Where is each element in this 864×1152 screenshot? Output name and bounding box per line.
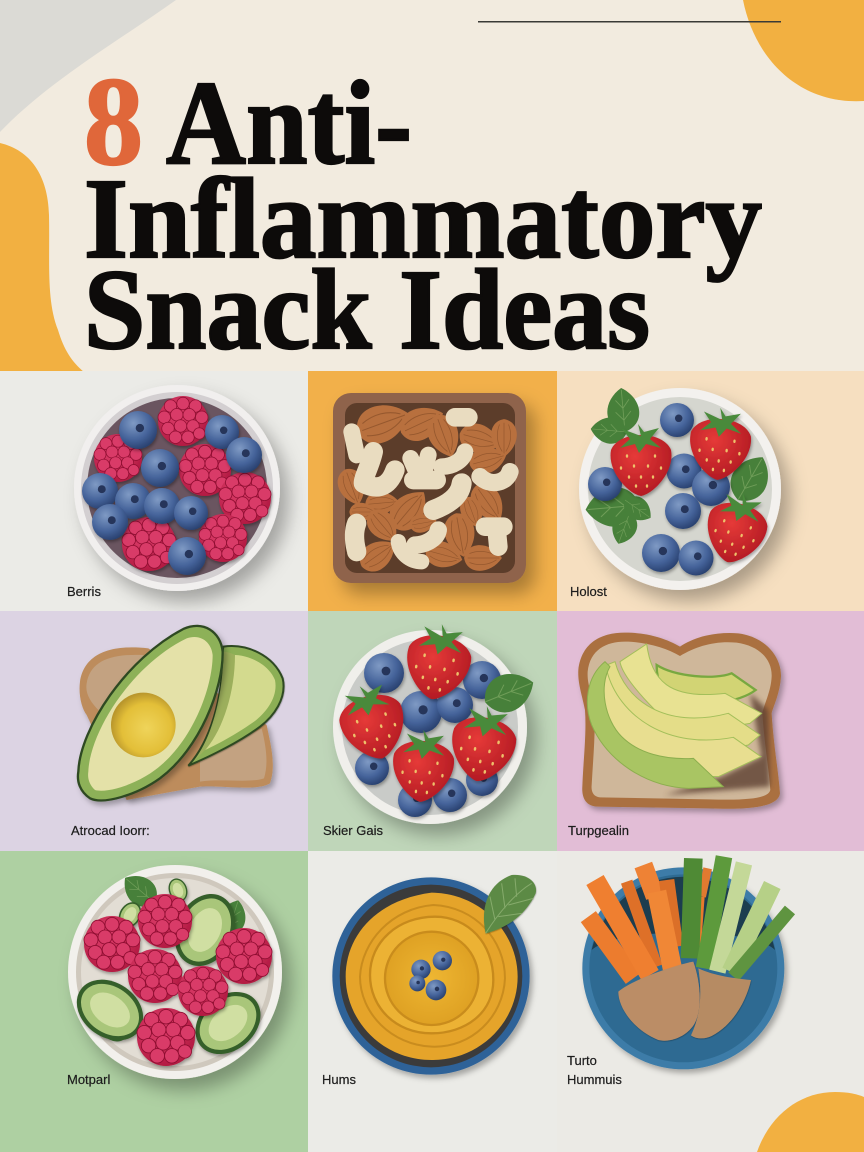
cucumbers bbox=[65, 876, 273, 1067]
leaf bbox=[478, 665, 540, 719]
panel: strawberries and blueberries bowl bbox=[557, 371, 864, 611]
toast shadow bbox=[665, 693, 770, 795]
decorative shape: orange top right bbox=[743, 0, 864, 101]
carrots bbox=[588, 865, 708, 978]
label: Hummuis bbox=[567, 1072, 622, 1087]
label: Berris bbox=[67, 584, 101, 599]
panel: avocado toast bbox=[557, 611, 864, 851]
raspberries bbox=[84, 894, 272, 1066]
label: Holost bbox=[570, 584, 607, 599]
toast crust bbox=[578, 633, 781, 809]
blueberries bbox=[355, 653, 501, 817]
toast bbox=[80, 647, 273, 800]
hummus pool bbox=[385, 932, 478, 1025]
toast crumb bbox=[588, 642, 772, 800]
strawberries bbox=[332, 619, 521, 805]
raspberries bbox=[94, 396, 271, 571]
panel: berries bbox=[0, 371, 308, 611]
slice 3 bbox=[607, 662, 760, 748]
hummus ridge bbox=[370, 917, 493, 1033]
label bbox=[567, 1053, 622, 1087]
avocado half bbox=[78, 626, 223, 800]
panel: avocado half on toast bbox=[0, 611, 308, 851]
decorative shape: orange left bbox=[0, 143, 84, 372]
title: Inflammatory bbox=[84, 155, 762, 282]
plate bbox=[68, 865, 282, 1079]
panel: veggie sticks and pita bbox=[557, 851, 864, 1152]
panel: hummus bowl bbox=[308, 851, 557, 1152]
label: Turpgealin bbox=[568, 823, 629, 838]
label: Turto bbox=[567, 1053, 597, 1068]
panel: nuts bbox=[308, 371, 557, 611]
slice 2 bbox=[602, 670, 761, 777]
hummus outer swirl bbox=[360, 905, 505, 1047]
strawberries bbox=[611, 405, 774, 570]
slice 4 bbox=[620, 644, 762, 726]
panel: raspberries and cucumber plate bbox=[0, 851, 308, 1152]
blueberries bbox=[82, 411, 262, 575]
title: Anti- bbox=[166, 56, 412, 189]
label: Atrocad Ioorr: bbox=[71, 823, 150, 838]
blueberries bbox=[409, 951, 452, 1000]
title: 8 bbox=[84, 53, 143, 192]
background: header bbox=[0, 0, 864, 372]
label: Hums bbox=[322, 1072, 356, 1087]
bowl bbox=[582, 867, 784, 1069]
title bbox=[84, 53, 762, 373]
almonds bbox=[333, 396, 517, 578]
bowl and veggies artwork bbox=[582, 857, 790, 1069]
cashews bbox=[352, 417, 510, 562]
panel: mixed berries bowl bbox=[308, 611, 557, 851]
decorative shape: orange bottom right bbox=[757, 1092, 864, 1152]
hummus outer bbox=[346, 893, 518, 1060]
avocado pit hollow bbox=[111, 693, 176, 757]
decorative shape: grey corner bbox=[0, 0, 176, 132]
tray bbox=[333, 393, 526, 583]
title: Snack Ideas bbox=[84, 246, 650, 373]
avocado and toast artwork bbox=[78, 626, 284, 800]
toast artwork bbox=[578, 633, 781, 809]
bowl bbox=[332, 877, 530, 1075]
slice 5 bbox=[657, 665, 756, 705]
bowl bbox=[333, 630, 527, 824]
celery bbox=[690, 857, 790, 977]
leaves bbox=[101, 867, 251, 1043]
blueberries bbox=[588, 403, 730, 576]
header rule bbox=[478, 21, 781, 22]
label: Motparl bbox=[67, 1072, 110, 1087]
leaves bbox=[584, 387, 778, 548]
toast crumb bbox=[86, 655, 266, 782]
avocado slice bbox=[188, 646, 284, 766]
leaf bbox=[484, 875, 536, 933]
bowl bbox=[579, 388, 781, 590]
pita bbox=[618, 962, 751, 1041]
slice 1 bbox=[587, 662, 723, 788]
label: Skier Gais bbox=[323, 823, 383, 838]
bowl and hummus artwork bbox=[332, 875, 536, 1075]
bowl bbox=[74, 385, 280, 591]
